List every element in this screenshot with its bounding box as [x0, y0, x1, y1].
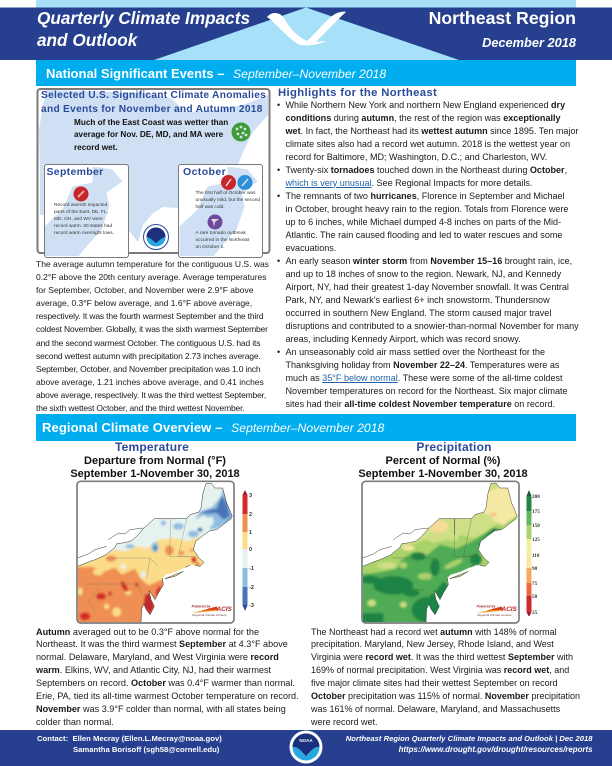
- heading: precipitation map: September 1-November 30, 2018: [358, 468, 528, 480]
- panel heading: and Events for November and Autumn 2018: [41, 104, 263, 114]
- heading: highlights: Highlights for the Northeast: [278, 86, 437, 98]
- chart: precipitation percent map: [361, 480, 540, 624]
- legend: temperature scale: [242, 490, 254, 611]
- text: The remnants of two hurricanes, Florence in September and Michael: [286, 190, 565, 200]
- text: October tornadoes: A rare tornado outbreak: [196, 231, 246, 236]
- callout: November summary: [74, 118, 228, 152]
- text: which is very unusual. See Regional Impacts for more details.: [286, 178, 532, 188]
- text: and up to 18 inches of snow to the region. Newark, NJ, and Kennedy: [286, 268, 561, 278]
- text: precipitation summary: were record wet.: [311, 717, 378, 727]
- text: up to 6 inches, while Michael dumped 4-8 inches on parts of the Mid-: [286, 216, 561, 226]
- legend: precipitation scale: 125: [532, 537, 540, 543]
- icon: warm and cold: [221, 175, 252, 190]
- section heading: national significant events: [36, 60, 576, 86]
- legend: precipitation scale: [526, 490, 540, 616]
- contact: Samantha Borisoff (sgh58@cornell.edu): [73, 745, 219, 754]
- legend: precipitation scale: 90: [532, 566, 538, 572]
- text: national summary: and the second warmest October. The contiguous U.S. had its: [36, 338, 260, 348]
- text: temperature summary: normal. Delaware, Maryland, and West Virginia were record: [36, 652, 279, 662]
- text: •: [277, 346, 280, 356]
- text: temperature summary: [36, 626, 299, 727]
- text: national summary: respectively. It was the fourth warmest September and the third: [36, 311, 263, 321]
- legend: temperature scale: 1: [249, 530, 252, 536]
- text: record for Baltimore, MD; Washington, D.C.; and Charleston, WV.: [286, 152, 547, 162]
- panel heading: [41, 90, 266, 114]
- legend: precipitation scale: 50: [532, 594, 538, 600]
- publication and link: https://www.drought.gov/drought/resources/reports: [399, 745, 592, 754]
- text: precipitation summary: [311, 626, 580, 727]
- text: national summary: The average autumn temperature for the contiguous U.S. was: [36, 259, 269, 269]
- text: temperature summary: Erie, PA, tied its all-time warmest October temperature on record.: [36, 691, 299, 701]
- heading: temperature map: [70, 440, 240, 480]
- section heading: regional climate overview: Regional Climate Overview – September–November 2018: [42, 420, 384, 435]
- footer band: [0, 730, 612, 766]
- title: and Outlook: [37, 30, 137, 50]
- text: conditions during autumn, the rest of the region was exceptionally: [286, 112, 561, 122]
- text: temperature summary: colder than normal.: [36, 717, 114, 727]
- text: •: [277, 100, 280, 110]
- text: October temperature: unusually mild, but the second: [196, 198, 260, 203]
- contact: Contact: Ellen Mecray (Ellen.L.Mecray@noaa.gov): [37, 734, 222, 742]
- text: national summary: the sixth wettest October, and the third wettest November.: [36, 403, 245, 413]
- icon: NOAA logo: [143, 224, 169, 250]
- heading: temperature map: September 1-November 30, 2018: [70, 468, 240, 480]
- text: national summary: [36, 259, 269, 413]
- logo: ACIS: ACIS: [216, 606, 233, 613]
- panel heading: Selected U.S. Significant Climate Anomalies: [41, 90, 266, 101]
- text: disruptions and contributed to a snowier-than-normal November for many: [286, 320, 579, 330]
- logo: ACIS: Powered by: [192, 604, 210, 608]
- text: Atlantic. The rain caused flooding and led to water rescues and some: [286, 230, 562, 240]
- legend: temperature scale: -3: [249, 603, 254, 609]
- date: December 2018: [482, 35, 576, 50]
- icon: warm thermometer: [74, 186, 88, 202]
- text: An early season winter storm from November 15–16 brought rain, ice,: [286, 256, 572, 266]
- text: •: [277, 164, 280, 174]
- text: October tornadoes: occurred in the Northeast: [196, 238, 249, 243]
- text: October temperature: half was cold.: [196, 205, 225, 210]
- text: precipitation summary: Virginia were record wet. It was the third wettest September with: [311, 652, 573, 662]
- text: areas, including Kennedy Airport, which was record snowy.: [286, 334, 521, 344]
- legend: temperature scale: -1: [249, 566, 254, 572]
- text: November temperatures on record for the Northeast. Six major climate: [286, 386, 568, 396]
- heading: precipitation map: Percent of Normal (%): [386, 455, 500, 467]
- header band: [0, 0, 612, 60]
- logo: ACIS: Powered by: [477, 604, 495, 608]
- section heading: national significant events: National Significant Events – September–November 2018: [46, 66, 386, 81]
- text: •: [277, 256, 280, 266]
- text: national summary: September, October, and November precipitation was 1.0 inch: [36, 364, 260, 374]
- text: September summary: record warm. 20 states had: [54, 224, 112, 229]
- publication and link: Northeast Region Quarterly Climate Impacts and Outlook | Dec 2018: [346, 734, 592, 742]
- logo: ACIS: Regional Climate Centers: [477, 613, 512, 617]
- publication and link: [346, 734, 592, 754]
- legend: precipitation scale: 200: [532, 494, 540, 500]
- text: wet. In fact, the Northeast had its wettest autumn since 1895. Ten major: [286, 126, 579, 136]
- text: precipitation summary: October precipitation was 115% of normal. November precipitation: [311, 691, 580, 701]
- legend: precipitation scale: 175: [532, 509, 540, 515]
- callout: November summary: average for Nov. DE, MD, and MA were: [74, 130, 223, 139]
- text: While Northern New York and northern New England experienced dry: [286, 100, 565, 110]
- text: precipitation summary: precipitation. Maryland, New Jersey, Rhode Island, and West: [311, 639, 554, 649]
- text: September summary: MD, OH, and WV were: [54, 217, 103, 222]
- contact: [37, 734, 222, 754]
- text: Thanksgiving holiday from November 22–24. Temperatures were as: [286, 360, 559, 370]
- legend: precipitation scale: 75: [532, 581, 538, 587]
- inset heading: October: [183, 166, 226, 178]
- heading: temperature map: Departure from Normal (°F): [84, 455, 226, 467]
- text: temperature summary: Septembers on record. October was 0.4°F warmer than normal.: [36, 678, 295, 688]
- text: October tornadoes: [196, 230, 250, 250]
- legend: temperature scale: 2: [249, 512, 252, 518]
- region heading: Northeast Region: [429, 8, 576, 28]
- text: national summary: second wettest autumn with precipitation 2.73 inches average.: [36, 351, 261, 361]
- text: national summary: 0.2°F above the 20th century average. Average temperatures: [36, 272, 267, 282]
- icon: rain: [232, 122, 250, 142]
- text: national summary: above average, 1.21 inches above average, and 0.41 inches: [36, 377, 264, 387]
- icon: tornado: [208, 214, 222, 230]
- heading: precipitation map: Precipitation: [416, 440, 492, 454]
- text: An unseasonably cold air mass settled over the Northeast for the: [286, 346, 545, 356]
- text: highlights bullets: [277, 100, 579, 409]
- callout: November summary: Much of the East Coast was wetter than: [74, 118, 228, 127]
- legend: temperature scale: 0: [249, 547, 252, 553]
- text: evacuations.: [286, 242, 336, 252]
- title: [37, 8, 250, 50]
- text: October temperature: [196, 190, 260, 210]
- text: national summary: for September, October, and November were 2.9°F above: [36, 285, 253, 295]
- heading: temperature map: Temperature: [115, 440, 189, 454]
- legend: temperature scale: -2: [249, 585, 254, 591]
- heading: precipitation map: [358, 440, 528, 480]
- text: climate sites also had a record wet autumn. 2018 is the wettest year on: [286, 138, 570, 148]
- text: September summary: parts of the East. DE, FL,: [54, 210, 108, 215]
- legend: precipitation scale: 25: [532, 610, 538, 616]
- icon: NOAA logo: NOAA: [299, 738, 313, 743]
- logo: ACIS: ACIS: [501, 606, 518, 613]
- text: temperature summary: November was 3.9°F colder than normal, with all states being: [36, 704, 286, 714]
- text: October tornadoes: on October 2.: [196, 245, 225, 250]
- text: in October, brought heavy rain to the region. Totals from Florence were: [286, 204, 568, 214]
- text: sites had their all-time coldest November temperature on record.: [286, 398, 555, 408]
- inset heading: September: [46, 166, 103, 178]
- legend: precipitation scale: 110: [532, 553, 540, 559]
- text: temperature summary: Northeast. It was the third warmest September at 4.3°F above: [36, 639, 288, 649]
- text: Park, NY, and Newark's earliest 6+ inch snowstorm. Thundersnow: [286, 294, 550, 304]
- section heading: regional climate overview: [36, 414, 576, 441]
- callout: November summary: record wet.: [74, 143, 118, 152]
- text: precipitation summary: The Northeast had a record wet autumn with 148% of normal: [311, 626, 557, 636]
- text: October temperature: The first half of October was: [196, 191, 256, 196]
- text: September summary: Record warmth impacted: [54, 203, 107, 208]
- legend: temperature scale: 3: [249, 493, 252, 499]
- text: September summary: [54, 202, 114, 236]
- text: temperature summary: Autumn averaged out to be 0.3°F above normal for the: [36, 626, 259, 636]
- text: national summary: average, 0.3°F below average, and 1.6°F above average,: [36, 298, 252, 308]
- text: temperature summary: warm. Elkins, WV, and Atlantic City, NJ, had their warmest: [36, 665, 271, 675]
- text: precipitation summary: five major climate sites had their wettest September on record: [311, 678, 558, 688]
- text: Twenty-six tornadoes touched down in the Northeast during October,: [286, 164, 567, 174]
- panel: U.S. climate anomalies map: [36, 88, 270, 254]
- logo: ACIS: [192, 604, 233, 617]
- panel: September inset: [44, 164, 129, 258]
- text: Airport, NY, had their greatest 1-day November snowfall. It was Central: [286, 282, 569, 292]
- text: occurred in southern New England. The storm caused major travel: [286, 308, 551, 318]
- chart: temperature departure map: [76, 480, 254, 624]
- text: •: [277, 190, 280, 200]
- logo: ACIS: [477, 604, 518, 617]
- icon: NOAA logo: [290, 730, 322, 764]
- logo: ACIS: Regional Climate Centers: [192, 613, 227, 617]
- text: September summary: record warm overnight lows.: [54, 231, 114, 236]
- title: Quarterly Climate Impacts: [37, 8, 250, 28]
- legend: precipitation scale: 150: [532, 523, 540, 529]
- text: national summary: above average, respectively. It was the third wettest September,: [36, 390, 266, 400]
- text: precipitation summary: 169% of normal precipitation. West Virginia was record wet, and: [311, 665, 569, 675]
- text: national summary: coldest November. Globally, it was the sixth warmest September: [36, 324, 268, 334]
- text: much as 35°F below normal. These were some of the all-time coldest: [286, 372, 563, 382]
- text: precipitation summary: was 161% of normal. Delaware, Maryland, and Massachusetts: [311, 704, 560, 714]
- panel: October inset: [178, 164, 263, 258]
